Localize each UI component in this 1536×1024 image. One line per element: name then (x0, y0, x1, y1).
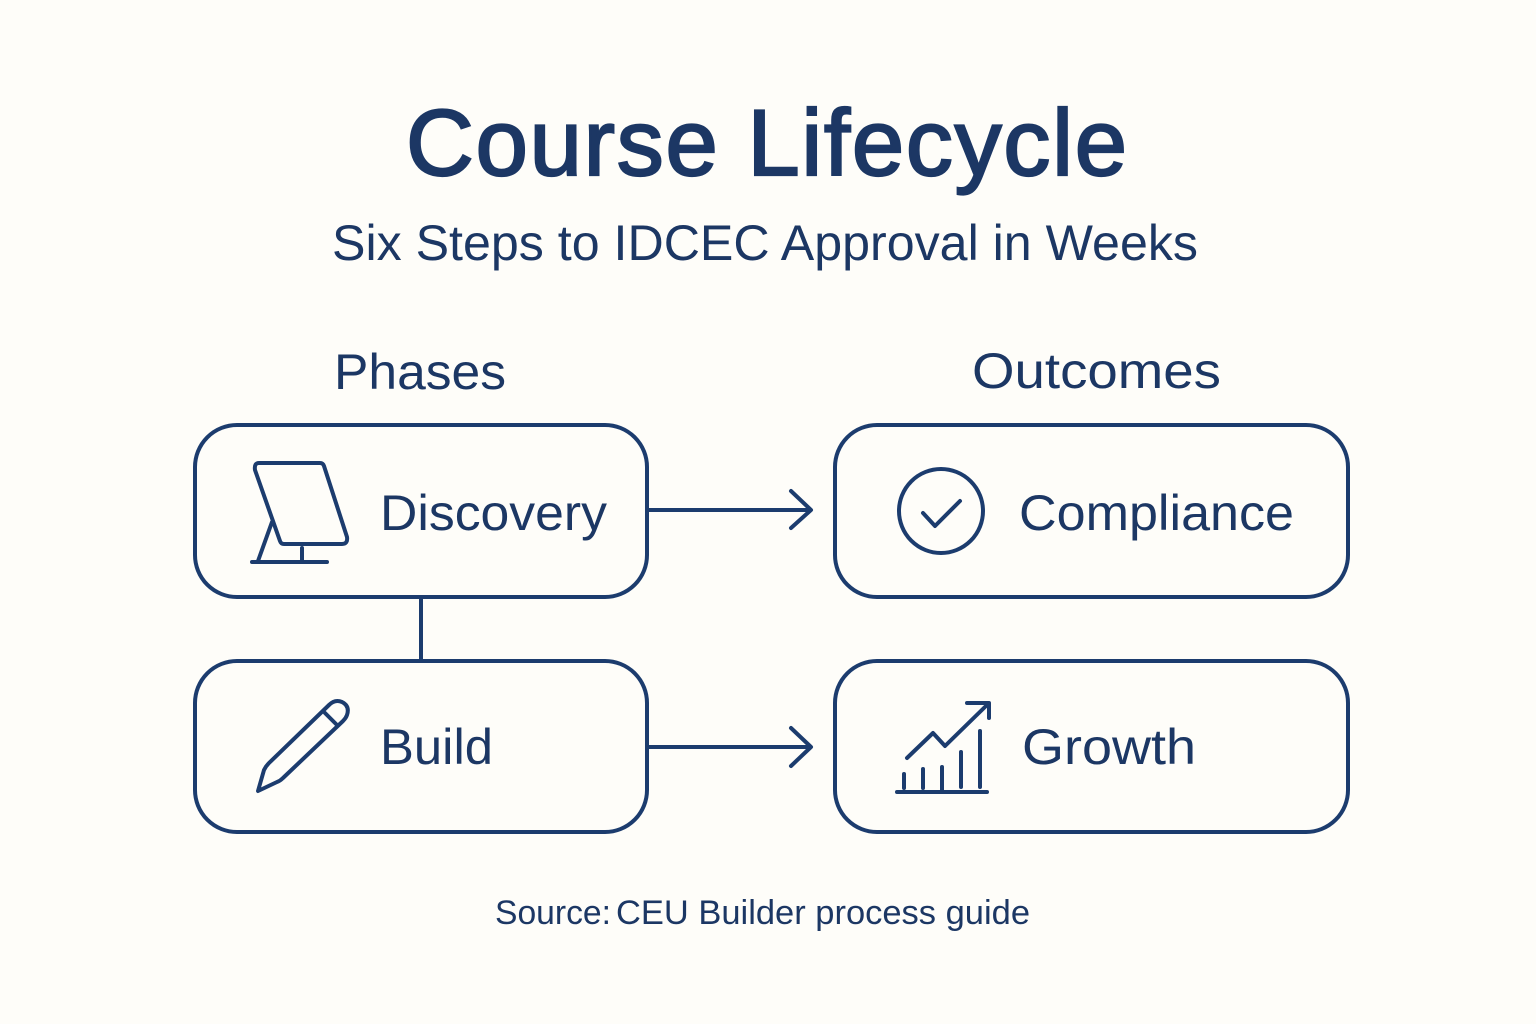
subtitle: Six Steps to IDCEC Approval in Weeks (332, 215, 1198, 271)
heading: outcomes: Outcomes (972, 343, 1221, 399)
connector: discovery to build (419, 597, 423, 661)
label: discovery: Discovery (380, 485, 607, 541)
arrow: build to growth (647, 728, 811, 766)
source note: CEU Builder process guide (616, 894, 1030, 932)
arrow: discovery to compliance (647, 491, 811, 528)
label: compliance: Compliance (1019, 485, 1294, 541)
icon: check circle (899, 469, 983, 553)
panel: growth (835, 661, 1348, 832)
panel: discovery (195, 425, 647, 597)
panel: compliance (835, 425, 1348, 597)
icon: pencil (258, 701, 348, 791)
heading: phases: Phases (334, 344, 506, 400)
label: growth: Growth (1022, 719, 1196, 775)
icon: growth chart (897, 703, 989, 792)
label: build: Build (380, 719, 493, 775)
icon: tablet on stand (252, 463, 347, 562)
panel: build (195, 661, 647, 832)
source note: Source: (495, 894, 611, 932)
title: Course Lifecycle (406, 90, 1127, 195)
